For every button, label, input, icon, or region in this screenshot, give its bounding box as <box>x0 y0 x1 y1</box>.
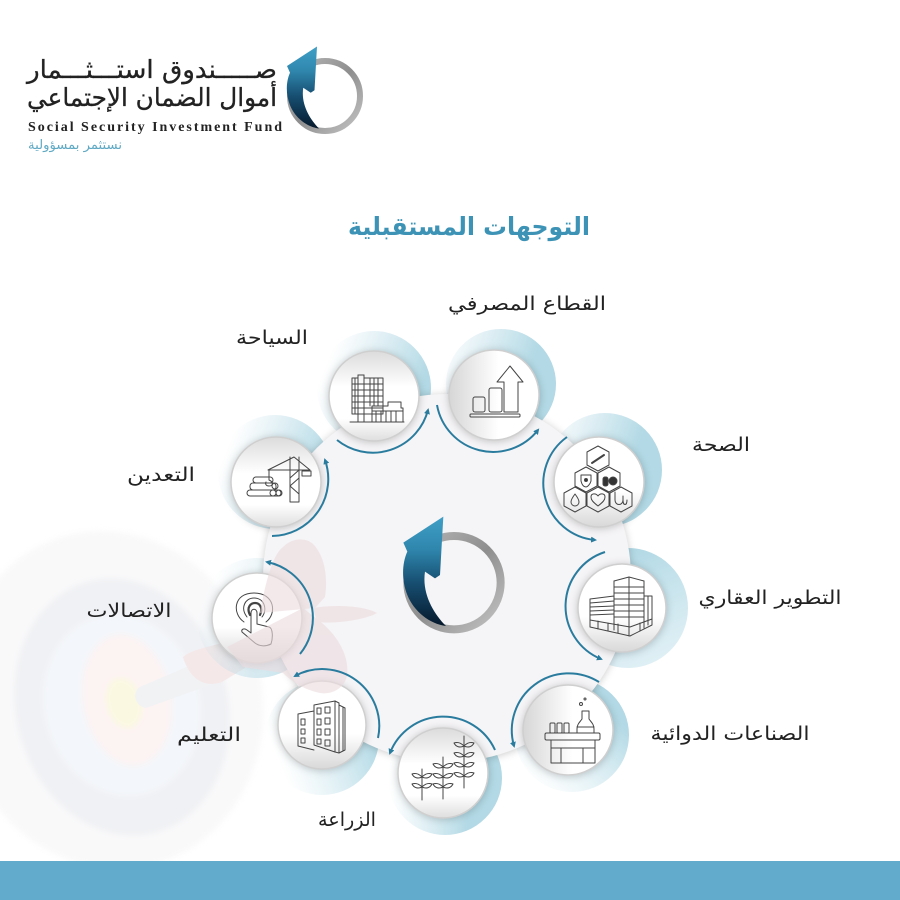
footer band <box>0 861 900 900</box>
background target <box>0 496 301 900</box>
icon: hotel building <box>350 375 404 422</box>
logo name: صـــــندوق استـــثـــمار <box>25 55 277 85</box>
node: mining <box>231 437 321 527</box>
icon: lab bench <box>545 698 600 763</box>
dart left flight <box>183 640 245 684</box>
node: agriculture <box>398 728 488 818</box>
dart flights <box>227 539 377 693</box>
halo rings behind the circles <box>197 329 688 835</box>
label: education: التعليم <box>177 724 241 746</box>
node: telecommunications <box>212 573 302 663</box>
flow arrows <box>267 405 605 753</box>
node: health <box>554 437 644 527</box>
logo mark <box>287 46 360 131</box>
node: banking <box>449 350 539 440</box>
icon: school building <box>298 701 345 753</box>
node: pharmaceutical industries <box>523 685 613 775</box>
title: التوجهات المستقبلية <box>348 212 590 242</box>
label: health: الصحة <box>692 434 750 456</box>
center logo mark <box>403 517 501 629</box>
central disc <box>263 394 631 762</box>
label: real estate: التطوير العقاري <box>698 587 842 609</box>
icon: bars and up arrow <box>470 366 523 417</box>
node: education <box>278 681 366 769</box>
icon: touch hand <box>236 593 273 646</box>
label: pharmaceutical: الصناعات الدوائية <box>650 723 810 745</box>
logo tagline: نستثمر بمسؤولية <box>28 138 122 153</box>
icon: plants <box>412 736 474 800</box>
icon: office block <box>590 577 652 636</box>
node: real estate <box>578 564 666 652</box>
label: agriculture: الزراعة <box>318 809 376 831</box>
label: mining: التعدين <box>127 464 195 486</box>
logo subtitle: أموال الضمان الإجتماعي <box>27 80 277 112</box>
logo english name: Social Security Investment Fund <box>28 120 282 135</box>
label: telecommunications: الاتصالات <box>86 600 172 622</box>
logo <box>25 46 360 153</box>
icon: crane and logs <box>247 457 311 502</box>
dart shaft <box>135 656 224 708</box>
label: banking: القطاع المصرفي <box>448 293 606 315</box>
label: tourism: السياحة <box>236 327 308 349</box>
node: tourism <box>329 351 419 441</box>
icon: hexagons <box>564 446 632 512</box>
